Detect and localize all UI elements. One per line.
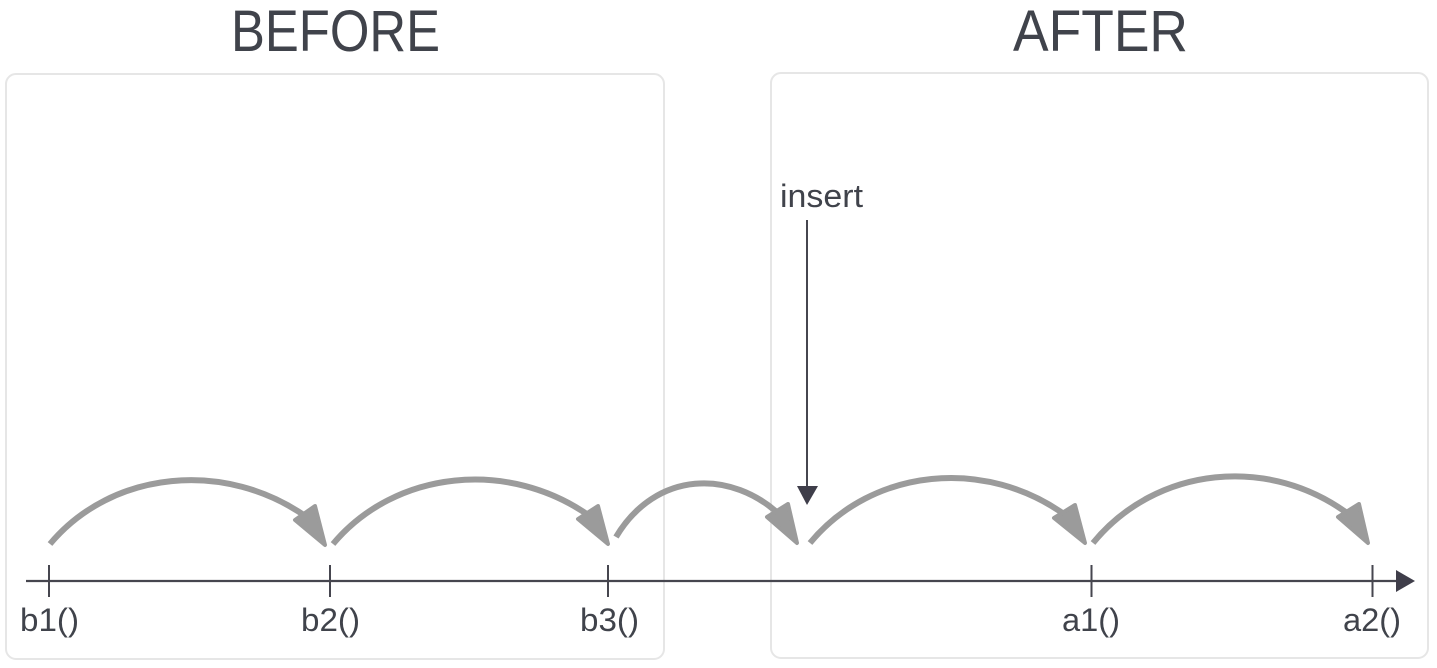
panel: after xyxy=(771,73,1428,658)
label: a1(): a1() xyxy=(1062,602,1120,638)
label: b3(): b3() xyxy=(580,602,639,638)
arrow: a1 to a2 xyxy=(1093,476,1368,543)
arrow: b3 to insertion point xyxy=(616,483,797,543)
label: b2(): b2() xyxy=(301,602,360,638)
heading: after: AFTER xyxy=(1013,0,1188,64)
arrow: insert pointer xyxy=(797,220,818,505)
arrow: b1 to b2 xyxy=(50,480,325,545)
panel: before xyxy=(6,74,664,659)
label: insert: insert xyxy=(780,178,863,214)
label: a2(): a2() xyxy=(1343,602,1401,638)
label: b1(): b1() xyxy=(20,602,79,638)
arrow: b2 to b3 xyxy=(333,480,608,544)
heading: before: BEFORE xyxy=(231,0,440,64)
arrow: insertion point to a1 xyxy=(810,478,1085,543)
timeline axis xyxy=(26,565,1415,597)
